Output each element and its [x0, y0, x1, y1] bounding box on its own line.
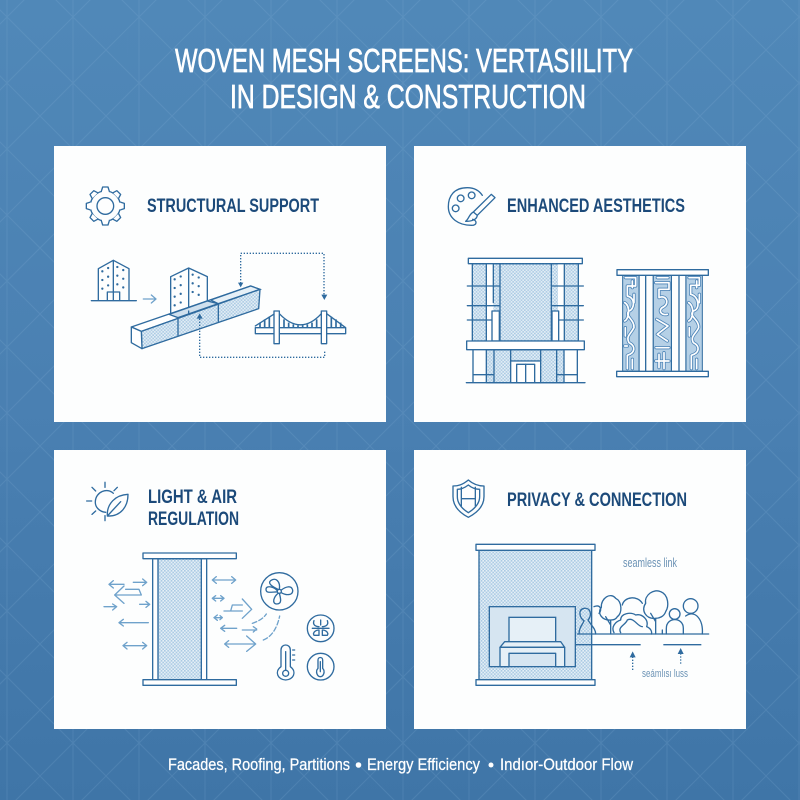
heading: light and air regulation — [148, 486, 239, 530]
building facade — [466, 258, 585, 383]
building on beam — [171, 268, 207, 314]
icon: sun and leaf — [87, 482, 128, 521]
panel: light and air regulation — [54, 450, 386, 729]
title: WOVEN MESH SCREENS: VERTASIILITY — [175, 42, 633, 79]
icon: thermometer badge — [307, 653, 334, 680]
label: seamless loss: seámlısı luss — [642, 668, 688, 680]
panel: privacy and connection — [414, 450, 746, 729]
dotted up arrows — [630, 648, 684, 670]
dotted arrows — [197, 253, 327, 357]
patterned screen — [617, 270, 708, 377]
heading: light and air regulation: REGULATION — [148, 508, 239, 530]
mesh screen — [143, 553, 236, 685]
heading: light and air regulation: LIGHT & AIR — [148, 486, 237, 508]
building left — [91, 260, 136, 301]
footer: Indıor-Outdoor Flow — [500, 756, 633, 774]
airflow arrows left — [104, 579, 150, 649]
title — [175, 42, 633, 115]
structural drawings — [86, 187, 346, 357]
panel: structural support — [54, 146, 386, 422]
icon: gear — [86, 187, 124, 225]
airflow arrows right — [212, 577, 257, 651]
panel: enhanced aesthetics — [414, 146, 746, 422]
ground lines — [575, 634, 709, 645]
curved air dashes — [252, 614, 280, 640]
icon: vent — [307, 615, 334, 642]
regulation drawings — [87, 482, 334, 685]
mesh beam — [131, 286, 260, 349]
footer — [168, 756, 633, 774]
label: seamless link: seamless link — [623, 555, 677, 570]
outdoor trees and people — [579, 591, 702, 634]
arrow — [143, 295, 156, 303]
privacy drawings — [453, 480, 709, 685]
bridge — [255, 311, 346, 344]
room with bench — [489, 607, 575, 667]
icon: palette — [448, 188, 495, 225]
title: IN DESIGN & CONSTRUCTION — [230, 78, 586, 115]
icon: shield — [453, 480, 484, 517]
icon: fan — [261, 573, 298, 610]
footer: Facades, Roofing, Partitions — [168, 756, 350, 774]
heading: privacy and connection: PRIVACY & CONNECTION — [507, 489, 687, 511]
footer: Energy Efficiency — [367, 756, 481, 774]
aesthetics drawings — [448, 188, 708, 383]
heading: structural support: STRUCTURAL SUPPORT — [147, 195, 319, 217]
mesh wall — [476, 544, 595, 685]
icon: thermometer — [277, 645, 295, 680]
heading: enhanced aesthetics: ENHANCED AESTHETICS — [507, 195, 685, 217]
